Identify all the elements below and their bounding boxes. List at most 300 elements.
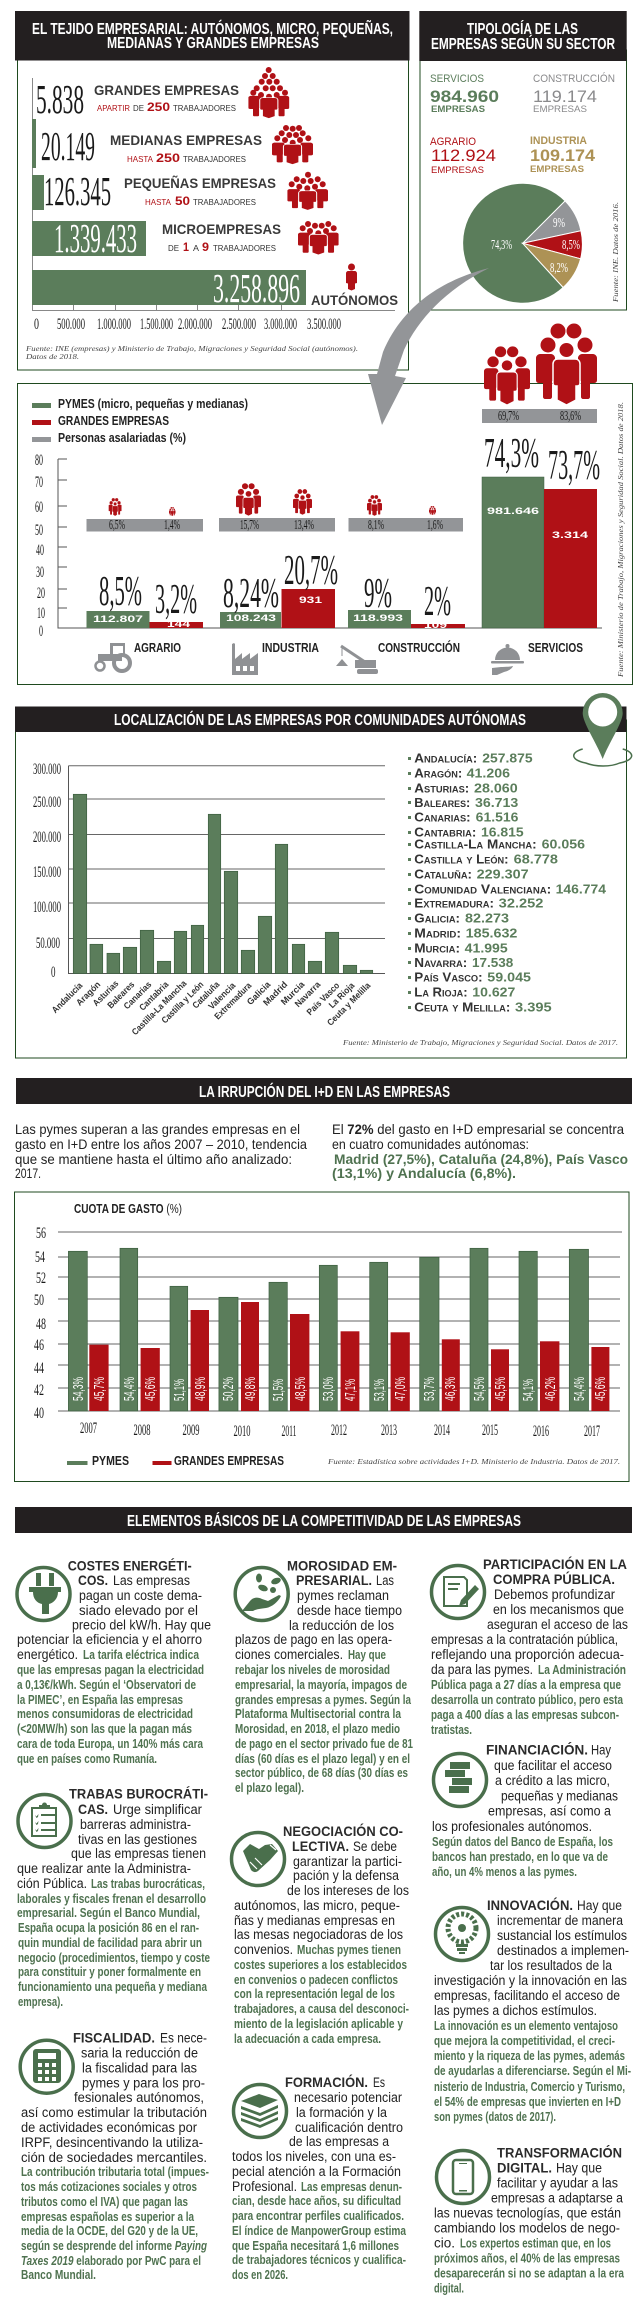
text: costes energéticos: Las empresas [113,1573,190,1588]
chart axis: 60 [35,499,43,516]
text block: comunidades I+D: El 72% del gasto en I+D empresarial se concentra [332,1121,624,1137]
icon: crowd microempresas [298,221,339,255]
text: fiscalidad: Banco Mundial. [21,2268,96,2282]
bar chart: cuota de gasto: 45,6% [592,1377,609,1401]
label: medianas empresas: MEDIANAS EMPRESAS [110,132,262,148]
text: formación: necesario potenciar [294,2090,402,2105]
text: morosidad: pymes reclaman [297,1588,389,1603]
text: negociación colectiva: autónomos, las micro, peque- [234,1898,400,1913]
chart axis: 40 [36,542,44,559]
text: formación: pecial atención a la Formación [232,2164,401,2179]
text: negociación colectiva: NEGOCIACIÓN CO- [283,1824,403,1839]
sector: agrario [86,498,203,629]
text: morosidad: Plataforma Multisectorial contra la [235,1707,402,1721]
text: formación: que España necesitará 1,6 millones [232,2239,399,2253]
text: formación: Las empresas denun- [301,2180,402,2194]
bar chart: cuota de gasto: 51,5% [270,1379,287,1401]
list: empresas por comunidad: 146.774 [556,882,607,897]
icon: cloche [491,644,524,675]
text: morosidad: de pago en el sector privado fue de 81 [235,1737,413,1751]
text block: pymes I+D: 2017. [15,1165,41,1181]
sector: servicios: 69,7% [498,409,519,424]
bar chart: number of companies by size [32,76,395,333]
pie chart: sectors: 8,5% [562,238,580,253]
list: empresas por comunidad: Extremadura: [414,896,494,911]
text: negociación colectiva [234,1824,409,2046]
stat: industria: EMPRESAS [530,164,584,174]
source note: Fuente: Estadística sobre actividades I+D. Ministerio de Industria. Datos de 2017. [327,1457,620,1466]
text: financiación: a crédito a las micro, [495,1773,610,1788]
label: microempresas: TRABAJADORES [213,244,276,253]
text: participación en la compra pública: en los mecanismos que [493,1602,624,1617]
text: trabas burocráticas: CAS. [78,1802,108,1817]
text: morosidad: empresarial, la mayoría, impagos de [235,1678,407,1692]
text: negociación colectiva: con la representación legal de los [234,1987,395,2001]
bar chart: cuota de gasto: 54,3% [70,1377,87,1401]
text: fiscalidad: la fiscalidad para las [82,2061,197,2076]
text block: pymes I+D: Las pymes superan a las grandes empresas en el [15,1121,300,1137]
text: formación: FORMACIÓN. [285,2075,368,2090]
text: formación: la formación y la [296,2105,387,2120]
text: participación en la compra pública: COMPRA PÚBLICA. [493,1572,615,1587]
bar chart: empresas por comunidad: Canarias [122,979,153,1011]
bar chart: empresas por comunidad: Extremadura [212,980,254,1021]
source note [25,344,358,361]
bar chart: cuota de gasto: 56 [36,1225,46,1242]
category labels: SERVICIOS [528,640,583,655]
text: transformación digital: TRANSFORMACIÓN [497,2146,622,2160]
list: empresas por comunidad: 36.713 [475,795,518,810]
list: empresas por comunidad: Galicia: [414,911,460,926]
bar chart: number of companies by size: 1.339.433 [54,215,137,261]
text: negociación colectiva: las mesas negociadoras de los [234,1927,403,1942]
bar chart: cuota de gasto: 53,1% [371,1379,388,1401]
text: costes energéticos: pagan un coste dema- [79,1588,202,1603]
text: costes energéticos: cara de toda Europa, un 140% más cara [17,1737,204,1751]
text: formación: cualificación dentro [295,2120,403,2135]
bar chart: cuota de gasto: 45,7% [91,1377,108,1401]
bar chart: number of companies by size: 5.838 [36,76,84,122]
sector: servicios: 3.314 [552,530,588,540]
bar chart: number of companies by size: 20.149 [41,123,95,169]
bar chart: cuota de gasto: 2015 [482,1422,498,1439]
text: negociación colectiva: LECTIVA. [292,1839,349,1854]
icon: coins [434,1754,486,1806]
stat: agrario: 112.924 [431,146,496,165]
text: costes energéticos: La tarifa eléctrica indica [83,1648,200,1662]
bar chart: empresas por comunidad: 300.000 [33,761,61,778]
bar chart: empresas por comunidad: Cantabria [137,979,171,1013]
label: medianas empresas [110,132,262,165]
stat: industria: 109.174 [530,146,596,165]
bar chart: empresas por comunidad: Asturias [91,978,120,1008]
text: innovación [434,1898,631,2124]
text: fiscalidad: según se desprende del informe Paying [21,2239,207,2253]
text: innovación: destinados a implemen- [497,1943,629,1958]
bar chart: empresas por comunidad: 150.000 [33,864,61,881]
source note: Fuente: INE. Datos de 2016. [611,202,620,303]
bar chart: empresas por comunidad: 250.000 [33,794,61,811]
text: transformación digital: cambiando los modelos de nego- [434,2220,620,2236]
label: grandes empresas: 250 [147,100,170,114]
text: transformación digital: empresas a adaptarse a [491,2190,623,2206]
bar chart: cuota de gasto: 54,4% [121,1377,138,1401]
text: negociación colectiva: trabajadores, a causa del desconoci- [234,2002,409,2016]
text: innovación: sustancial los estímulos [497,1928,627,1943]
label: microempresas: 9 [202,240,209,254]
label: grandes empresas: GRANDES EMPRESAS [94,82,239,98]
stat: servicios: SERVICIOS [430,73,484,85]
text: fiscalidad: de actividades económicas por [21,2120,197,2135]
bar chart: empresas por comunidad: Andalucía [50,980,85,1015]
text: negociación colectiva: costes superiores a los establecidos [234,1958,407,1972]
text: innovación: Hay que [577,1898,622,1913]
sector: agrario: 3,2% [155,577,197,623]
stat: servicios: 984.960 [430,87,499,106]
text: participación en la compra pública: tratistas. [431,1723,472,1737]
sector: industria: 108.243 [226,613,276,623]
label: grandes empresas: TRABAJADORES [173,104,236,113]
bar chart: cuota de gasto: 45,5% [492,1377,509,1401]
bar chart: number of companies by size: 500.000 [57,316,85,333]
list: empresas por comunidad: País Vasco: [414,970,483,985]
bar chart: empresas por comunidad: Madrid [261,979,289,1008]
bar chart: cuota de gasto: 2011 [282,1423,296,1440]
text: innovación: las pymes a dichos estímulos. [434,2003,597,2018]
heading: localización [15,706,626,732]
text: financiación: pequeñas y medianas [501,1788,618,1804]
text: negociación colectiva: convenios. [234,1942,293,1957]
list: empresas por comunidad: Andalucía: [414,751,477,766]
text: financiación: FINANCIACIÓN. [486,1742,588,1758]
text: fiscalidad: ción de sociedades mercantiles. [21,2150,207,2165]
sector: construcción: 1,6% [427,518,443,533]
legend [67,1453,284,1468]
text: innovación: son pymes (datos de 2017). [434,2110,556,2124]
text: fiscalidad: empresas españolas es superior a la [21,2210,195,2224]
text: fiscalidad: La contribución tributaria total (impues- [21,2165,209,2179]
bar chart: empresas por comunidad: 0 [51,964,56,981]
stat: servicios [430,73,499,114]
stat: agrario: AGRARIO [430,136,476,148]
label: grandes empresas [94,82,239,114]
text: innovación: INNOVACIÓN. [487,1898,573,1913]
bar chart: cuota de gasto: 40 [34,1405,44,1422]
text block: pymes I+D: gasto en I+D entre los años 2007 – 2010, tendencia [15,1136,307,1152]
text: morosidad: plazos de pago en las opera- [235,1632,392,1647]
list: empresas por comunidad: Cataluña: [414,866,472,881]
list: empresas por comunidad: 28.060 [474,780,518,795]
text: participación en la compra pública: PARTICIPACIÓN EN LA [483,1557,627,1572]
text: formación: Profesional. [232,2179,297,2194]
text: financiación: los profesionales autónomos. [432,1819,592,1834]
text: formación: Es [373,2075,385,2090]
sector: construcción [348,495,465,630]
icon: crowd medianas empresas [272,125,313,165]
text: costes energéticos: COSTES ENERGÉTI- [68,1559,192,1574]
text: fiscalidad: FISCALIDAD. [73,2031,155,2046]
stat: agrario: EMPRESAS [431,165,484,175]
text: fiscalidad: tos más cotizaciones sociales y otros [21,2180,197,2194]
legend: PYMES [92,1453,129,1468]
text: costes energéticos: que las empresas pagan la electricidad [17,1663,204,1677]
bar chart: empresas por comunidad: Galicia [245,979,273,1007]
text: innovación: investigación y la innovación en las [434,1973,627,1988]
label: pequeñas empresas: PEQUEÑAS EMPRESAS [124,174,276,191]
text: trabas burocráticas: España ocupa la posición 86 en el ran- [18,1921,199,1935]
list: empresas por comunidad: 32.252 [499,896,543,911]
bar chart: empresas por comunidad: Aragón [74,979,102,1008]
text: financiación [432,1742,618,1879]
bar chart: number of companies by size: 3.258.896 [213,265,300,311]
heading: tejido empresarial: EL TEJIDO EMPRESARIAL: AUTÓNOMOS, MICRO, PEQUEÑAS, [32,18,393,38]
arrow: from pie to sector chart [368,268,489,425]
chart axis: 20 [37,585,45,602]
text: costes energéticos: precio del kW/h. Hay que [72,1617,211,1632]
bar chart: cuota de gasto: 53,7% [421,1377,438,1401]
sector: construcción: 109 [424,620,447,630]
bar chart: cuota de gasto: 44 [34,1360,44,1377]
bar chart: cuota de gasto: 50 [34,1292,44,1309]
category labels: CONSTRUCCIÓN [378,640,460,655]
bar chart: cuota de gasto: 2016 [533,1423,549,1440]
text: morosidad: ciones comerciales. [235,1647,343,1662]
bar chart: empresas por comunidad: Ceuta y Melilla [325,980,373,1028]
text: transformación digital: DIGITAL. [497,2160,552,2176]
list: empresas por comunidad: Comunidad Valenciana: [414,882,551,897]
icon: crane [336,646,378,674]
sector: servicios: 981.646 [487,506,539,516]
bar chart: cuota de gasto: 46 [34,1337,44,1354]
icon: location pin [574,693,632,766]
text: trabas burocráticas: que las empresas tienen [71,1846,206,1861]
text: financiación: empresas, así como a [488,1804,611,1818]
heading: tipología: TIPOLOGÍA DE LAS [467,19,578,38]
text block: pymes I+D: que se mantiene hasta el último año analizado: [15,1151,292,1167]
panel: localización [15,693,632,1058]
label: pequeñas empresas [124,174,276,208]
heading: tipología [419,11,627,61]
sector: construcción: 9% [364,571,392,617]
label: microempresas: 1 [183,240,189,254]
text: morosidad: PRESARIAL. [296,1573,372,1588]
icon: contract and pen [432,1566,484,1618]
bar chart: number of companies by size: 0 [34,316,39,333]
text: morosidad [235,1559,413,1795]
icon: smartphone [436,2150,490,2204]
panel: cuota de gasto [14,1192,629,1482]
text: negociación colectiva: Se debe [353,1839,397,1854]
text: transformación digital: digital. [434,2282,464,2296]
bar chart: cuota de gasto: 47,0% [392,1377,409,1401]
text: costes energéticos: (<20MW/h) son las que la pagan más [17,1722,192,1736]
list: empresas por comunidad: 41.206 [467,766,510,781]
text: fiscalidad [21,2031,209,2282]
chart axis: 80 [35,452,43,469]
icon: clipboard [18,1794,71,1848]
sector: servicios: 83,6% [560,409,581,424]
text: negociación colectiva: pación y la defensa [293,1868,399,1883]
bar chart: number of companies by size: 3.500.000 [307,316,341,333]
bar chart: empresas por comunidad: Castilla y León [159,979,205,1025]
bar chart: cuota de gasto: 45,6% [142,1377,159,1401]
list: empresas por comunidad: La Rioja: [414,985,468,1000]
panel: tejido empresarial [15,11,410,370]
chart axis: 0 [39,623,43,640]
bar chart: cuota de gasto: 2014 [434,1422,450,1439]
panel: tipología [419,11,627,310]
text: trabas burocráticas: empresarial. Según el Banco Mundial, [17,1906,200,1920]
sector: construcción: 118.993 [353,613,403,623]
text: transformación digital: cio. [434,2236,455,2250]
sector: agrario: 1,4% [164,518,180,533]
text: costes energéticos: la PIMEC’, en España las empresas [17,1693,183,1707]
list: empresas por comunidad: Aragón: [414,766,462,781]
text: participación en la compra pública: empresas a la contratación pública, [431,1632,618,1647]
bar chart: number of companies by size: 126.345 [44,168,111,214]
label: medianas empresas: TRABAJADORES [183,155,246,164]
text: financiación: año, un 4% menos a las pymes. [432,1865,577,1879]
label: pequeñas empresas: HASTA [145,198,172,207]
list: empresas por comunidad: 17.538 [472,955,513,970]
legend: GRANDES EMPRESAS [174,1453,284,1468]
text: negociación colectiva: Muchas pymes tienen [297,1943,401,1957]
text: morosidad: rebajar los niveles de morosidad [235,1663,390,1677]
bar chart: cuota de gasto: 48 [36,1316,46,1333]
list: empresas por comunidad [408,751,607,1015]
text: trabas burocráticas: Urge simplificar [113,1802,202,1817]
bar chart: cuota de gasto: 54,1% [520,1379,537,1401]
text block: pymes I+D [15,1121,307,1181]
list: empresas por comunidad: Castilla-La Mancha: [414,836,537,851]
text: trabas burocráticas: negocio (procedimientos, tiempo y coste [18,1951,210,1965]
text: participación en la compra pública: reflejando una proporción adecua- [431,1647,624,1662]
category labels [134,640,583,655]
list: empresas por comunidad: Baleares: [414,795,470,810]
text: negociación colectiva: miento de la legislación aplicable y [234,2017,403,2031]
source note: Fuente: Ministerio de Trabajo, Migraciones y Seguridad Social. Datos de 2017. [342,1038,618,1047]
text: costes energéticos: siado elevado por el [79,1603,198,1618]
sector: agrario: 6,5% [109,518,125,533]
text: transformación digital: facilitar y ayudar a las [497,2176,618,2190]
stat: servicios: EMPRESAS [431,104,485,114]
text: negociación colectiva: en convenios o padecen conflictos [234,1973,398,1987]
text: fiscalidad: IRPF, desincentivando la utiliza- [21,2135,203,2150]
bar chart: empresas por comunidad: País Vasco [305,980,342,1017]
stat: industria [530,135,596,174]
sector: industria: 8,24% [223,571,279,617]
sector: servicios [482,324,600,628]
bar chart: cuota de gasto: 2012 [331,1422,347,1439]
text: formación: de trabajadores técnicos y cualifica- [232,2253,406,2267]
sector: industria: 15,7% [240,518,259,533]
text: trabas burocráticas: barreras administra- [80,1817,191,1832]
icon: crowd grandes empresas [248,67,289,119]
bar chart: cuota de gasto: 54 [35,1249,45,1266]
icon: light bulb with gears [436,1908,488,1960]
label: medianas empresas: HASTA [127,155,154,164]
legend [32,396,248,445]
text: costes energéticos: COS. [78,1573,108,1588]
text: financiación: que facilitar el acceso [494,1758,612,1773]
icon: plug [17,1568,70,1620]
bar chart: cuota de gasto [34,1225,622,1440]
list: empresas por comunidad: Navarra: [414,955,467,970]
panel: empresas por sector [18,324,632,684]
text: fiscalidad: tributos como el IVA) que pagan las [21,2195,188,2209]
icon: crowd pequeñas empresas [287,172,328,210]
text: negociación colectiva: ñas y medianas empresas en [234,1913,395,1928]
source note: Datos de 2018. [25,352,79,361]
bar chart: cuota de gasto: 2017 [584,1423,600,1440]
bar chart: number of companies by size: 2.000.000 [178,316,212,333]
sector: servicios: 74,3% [484,431,539,477]
bar chart: number of companies by size: 1.000.000 [97,316,131,333]
heading: elementos básicos [15,1507,632,1533]
bar chart: empresas por comunidad: Cataluña [190,979,222,1010]
text block: comunidades I+D: Madrid (27,5%), Cataluña (24,8%), País Vasco [334,1151,628,1167]
list: empresas por comunidad: 229.307 [477,866,529,881]
chart axis [35,452,602,640]
bar chart: cuota de gasto: 46,3% [442,1377,459,1401]
heading: elementos básicos: ELEMENTOS BÁSICOS DE LA COMPETITIVIDAD DE LAS EMPRESAS [127,1511,521,1530]
bar chart: cuota de gasto: 52 [36,1270,46,1287]
text: financiación: Hay [591,1742,611,1758]
stat: construcción: EMPRESAS [533,104,587,114]
text: fiscalidad: así como estimular la tributación [21,2105,207,2120]
list: empresas por comunidad: 3.395 [515,1000,552,1015]
source note: Fuente: INE (empresas) y Ministerio de Trabajo, Migraciones y Seguridad Social (autónomos). [25,344,358,353]
pie chart: sectors: 74,3% [491,238,512,253]
stat: construcción: CONSTRUCCIÓN [533,72,615,85]
sector: agrario: 144 [167,619,190,629]
text: morosidad: la reducción de los [289,1618,394,1633]
sector: agrario: 8,5% [99,569,142,615]
text: costes energéticos: que en países como Rumanía. [17,1752,157,1766]
chart axis: 10 [37,605,45,622]
icon: person autónomos [346,264,357,290]
label: autónomos: AUTÓNOMOS [311,291,398,308]
text: trabas burocráticas: empresa). [18,1995,63,2009]
bar chart: empresas por comunidad: 200.000 [33,829,61,846]
bar chart: cuota de gasto: 49,8% [242,1377,259,1401]
bar chart: empresas por comunidad: La Rioja [327,980,357,1010]
text: transformación digital [434,2146,625,2296]
bar chart: empresas por comunidad: Baleares [105,979,136,1010]
text: transformación digital: Hay que [556,2160,602,2176]
sector: construcción: 8,1% [368,518,384,533]
text: formación: para encontrar perfiles cualificados. [232,2209,404,2223]
pie chart: sectors [463,183,582,303]
text: costes energéticos [17,1559,211,1766]
list: empresas por comunidad: 16.815 [481,825,524,840]
bar chart: cuota de gasto: 51,1% [171,1379,188,1401]
text: innovación: incrementar de manera [497,1913,623,1928]
stat: agrario [430,136,496,175]
text: fiscalidad: fesionales autónomos, [74,2090,204,2105]
text: morosidad: Las [376,1573,394,1588]
heading: tejido empresarial [15,11,410,60]
list: empresas por comunidad: Cantabria: [414,825,476,840]
pie chart: sectors: 9% [553,216,565,231]
stat: construcción: 119.174 [533,87,597,106]
heading: irrupción I+D: LA IRRUPCIÓN DEL I+D EN LAS EMPRESAS [199,1082,450,1101]
legend: Personas asalariadas (%) [58,430,186,445]
text: trabas burocráticas: TRABAS BUROCRÁTI- [69,1787,208,1802]
text: fiscalidad: saria la reducción de [81,2046,198,2061]
label: medianas empresas: 250 [156,151,180,165]
text: morosidad: desde hace tiempo [297,1603,402,1618]
